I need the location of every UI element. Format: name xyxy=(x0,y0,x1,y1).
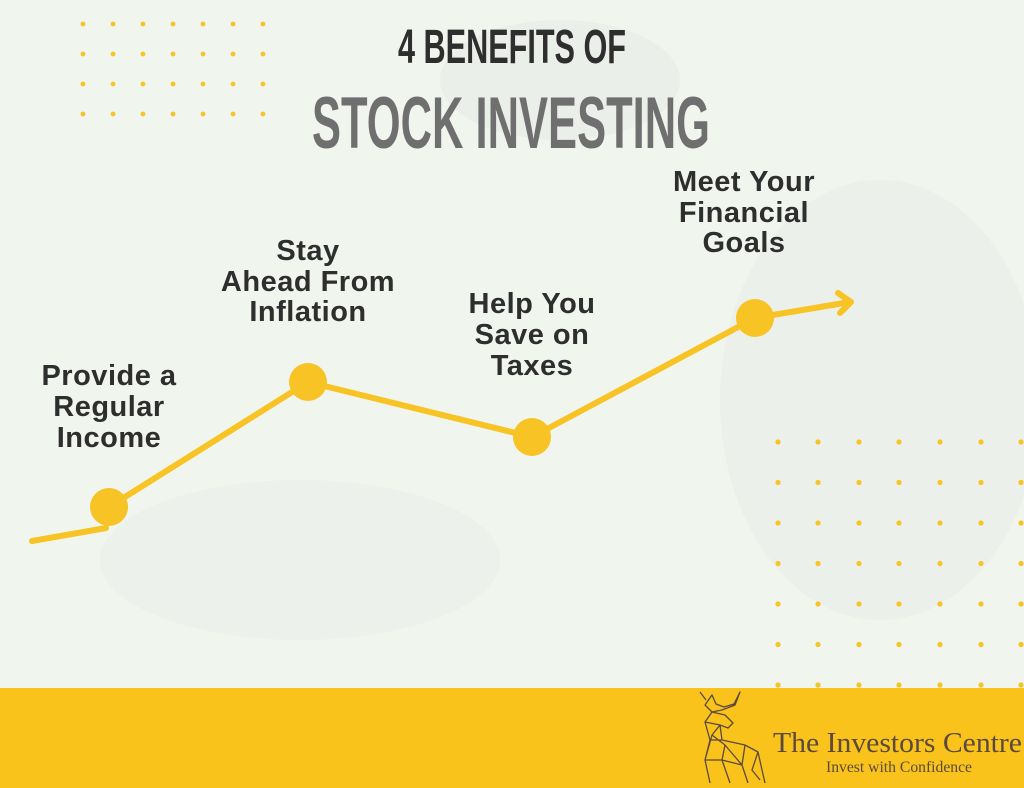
icon: bull logo xyxy=(700,692,765,783)
label: stay ahead from inflation xyxy=(221,235,395,328)
label: meet your financial goals: Goals xyxy=(702,227,786,259)
label: stay ahead from inflation: Inflation xyxy=(249,296,367,328)
title line 1: 4 BENEFITS OF xyxy=(398,21,626,74)
label: stay ahead from inflation: Stay xyxy=(276,235,340,267)
brand name: The Investors Centre xyxy=(773,728,1022,759)
label: provide a regular income: Provide a xyxy=(41,360,177,392)
label: help you save on taxes xyxy=(468,288,596,382)
title line 2: STOCK INVESTING xyxy=(312,83,710,164)
tagline: Invest with Confidence xyxy=(826,759,972,776)
label: help you save on taxes: Help You xyxy=(468,288,596,320)
label: stay ahead from inflation: Ahead From xyxy=(221,266,395,298)
label: provide a regular income: Income xyxy=(57,422,161,454)
label: provide a regular income: Regular xyxy=(53,391,165,423)
growth line chart xyxy=(32,293,851,541)
label: meet your financial goals xyxy=(673,166,815,259)
label: help you save on taxes: Taxes xyxy=(491,350,573,382)
label: provide a regular income xyxy=(41,360,177,454)
label: meet your financial goals: Financial xyxy=(679,197,809,229)
footer bar xyxy=(0,688,1024,788)
label: help you save on taxes: Save on xyxy=(475,319,589,351)
arrow head xyxy=(838,293,851,313)
dot grid: bottom right xyxy=(775,439,1024,688)
label: meet your financial goals: Meet Your xyxy=(673,166,815,198)
background texture xyxy=(100,20,1024,640)
dot grid: top left xyxy=(81,22,265,116)
